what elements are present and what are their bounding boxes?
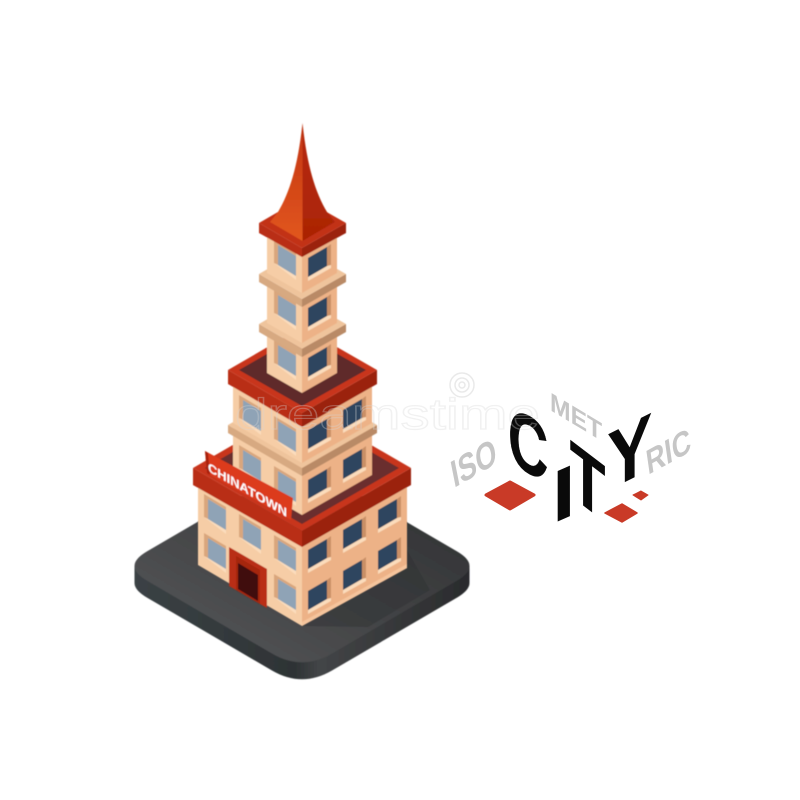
logo word: ric: RIC [644, 420, 693, 482]
ground floor windows [204, 494, 401, 614]
watermark [235, 373, 540, 439]
red diamond large [486, 482, 534, 509]
red diamond medium [605, 504, 637, 522]
logo letter: C: C [508, 388, 548, 501]
base plate [134, 470, 470, 679]
middle floor lower windows [239, 445, 366, 506]
red diamond small [633, 491, 648, 500]
tower tier three [267, 330, 337, 393]
middle floor upper walls [233, 380, 372, 463]
building: chinatown tower [193, 123, 411, 626]
ground floor walls [198, 480, 407, 626]
logo word: iso: ISO [448, 431, 500, 497]
middle floor upper windows [239, 395, 366, 456]
upper roof parapet [228, 327, 377, 427]
logo letter: Y: Y [607, 395, 652, 509]
middle cornice band [228, 382, 377, 476]
logo letter: T: T [570, 424, 605, 540]
entrance door [229, 547, 267, 608]
spire [270, 123, 335, 241]
tower band two [259, 299, 346, 357]
roof slab [259, 198, 346, 257]
watermark: dreamstime [235, 390, 540, 439]
tower band one [259, 249, 346, 307]
lower roof parapet [193, 405, 411, 547]
chinatown sign: CHINATOWN [208, 460, 287, 520]
middle floor lower walls [233, 420, 372, 515]
logo word: met: MET [550, 386, 602, 447]
logo letter: I: I [552, 447, 576, 540]
tower tier one [267, 230, 337, 293]
logo: isometric city [448, 386, 693, 540]
tower tier two [267, 280, 337, 343]
